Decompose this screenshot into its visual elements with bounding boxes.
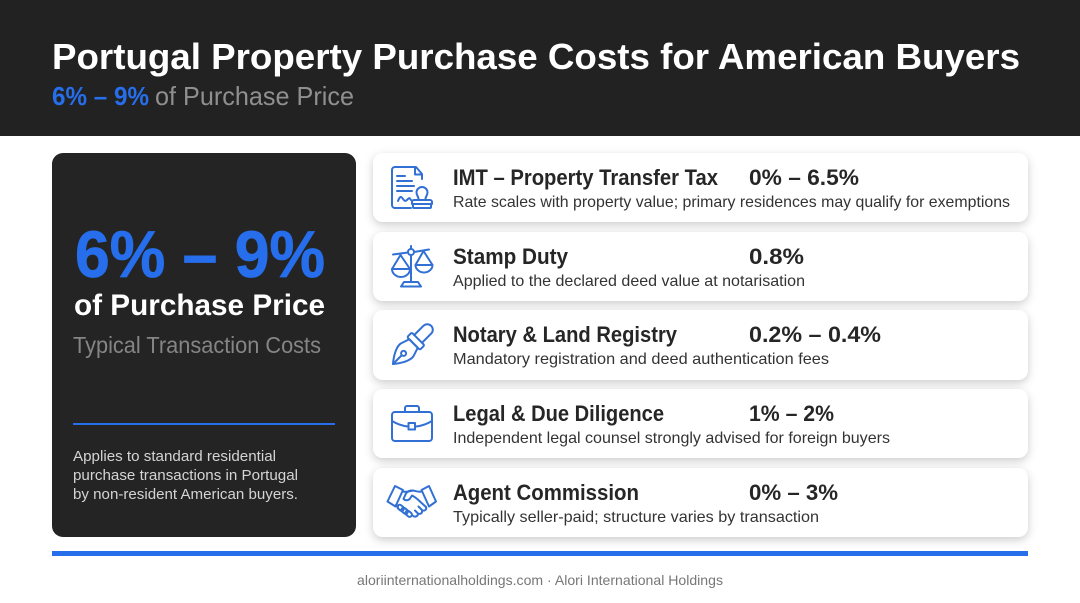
card description: Typically seller-paid; structure varies by transaction	[453, 509, 819, 526]
card value: 1% – 2%	[749, 401, 834, 426]
card description: Mandatory registration and deed authentication fees	[453, 351, 829, 368]
card: Stamp Duty	[373, 232, 1028, 301]
footer rule	[52, 551, 1028, 556]
card: IMT	[373, 153, 1028, 222]
icon: handshake	[388, 486, 436, 518]
panel: summary	[52, 153, 356, 537]
icon: scales	[392, 246, 432, 286]
panel note: Applies to standard residential	[73, 449, 276, 465]
icon: fountain pen	[387, 319, 438, 370]
big range figure: 6% – 9%	[75, 217, 325, 291]
card value: 0.8%	[749, 244, 804, 269]
subtitle: of Purchase Price	[155, 81, 354, 111]
panel subheading: Typical Transaction Costs	[73, 332, 321, 358]
card title: IMT – Property Transfer Tax	[453, 165, 719, 190]
card description: Rate scales with property value; primary residences may qualify for exemptions	[453, 194, 1010, 211]
panel note	[73, 449, 298, 503]
icon: briefcase	[392, 406, 432, 441]
title: Portugal Property Purchase Costs for American Buyers	[52, 36, 1020, 77]
card title: Legal & Due Diligence	[453, 401, 664, 426]
panel note: purchase transactions in Portugal	[73, 468, 298, 484]
header band	[0, 0, 1080, 136]
card value: 0% – 6.5%	[749, 165, 859, 190]
card description: Independent legal counsel strongly advised for foreign buyers	[453, 430, 890, 447]
card: Legal	[373, 389, 1028, 458]
card title: Notary & Land Registry	[453, 322, 678, 347]
footer text: aloriinternationalholdings.com · Alori International Holdings	[357, 572, 723, 588]
panel note: by non-resident American buyers.	[73, 487, 298, 503]
subtitle: 6% – 9%	[52, 81, 149, 111]
card value: 0% – 3%	[749, 480, 838, 505]
card: Notary	[373, 310, 1028, 380]
card title: Agent Commission	[453, 480, 639, 505]
card value: 0.2% – 0.4%	[749, 322, 881, 347]
icon: document with stamp	[392, 167, 432, 208]
card: Agent	[373, 468, 1028, 537]
panel heading: of Purchase Price	[74, 289, 325, 322]
card title: Stamp Duty	[453, 244, 569, 269]
card description: Applied to the declared deed value at notarisation	[453, 273, 805, 290]
